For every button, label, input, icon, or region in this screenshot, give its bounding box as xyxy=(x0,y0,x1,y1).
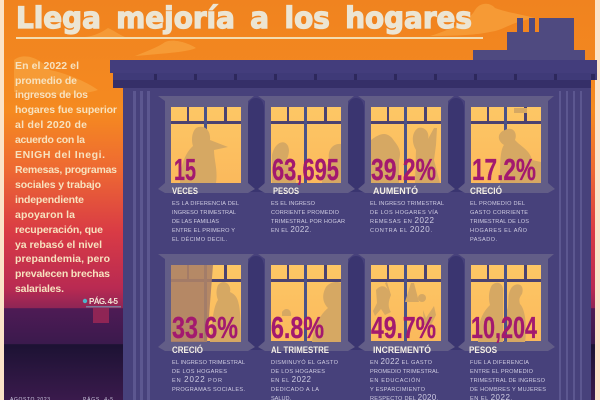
title: Llega mejoría a los hogares xyxy=(16,1,472,35)
number: 39.2% xyxy=(371,152,436,187)
description: GASTO CORRIENTE xyxy=(470,210,528,216)
label: VECES xyxy=(172,186,198,196)
silhouette: mother and child xyxy=(210,282,241,342)
intro text block: al del 2020 de xyxy=(15,119,87,131)
silhouette: people xyxy=(272,142,341,183)
label: CRECIÓ xyxy=(172,344,203,355)
page reference: PÁG. 4-5 xyxy=(89,297,119,306)
intro text block: En el 2022 el xyxy=(15,60,79,72)
description xyxy=(172,201,239,243)
description: DE LOS HOGARES xyxy=(172,369,227,375)
number: 63,695 xyxy=(272,152,339,187)
description xyxy=(271,359,339,400)
page reference xyxy=(83,297,121,323)
description xyxy=(172,360,245,393)
number: 33.6% xyxy=(172,310,238,345)
intro text block: ya rebasó el nivel xyxy=(15,239,102,251)
roof cornice xyxy=(110,60,597,88)
description: ENTRE EL PRIMERO Y xyxy=(172,228,235,234)
description: PROMEDIO TRIMESTRAL xyxy=(370,369,439,375)
description: DE LAS FAMILIAS xyxy=(172,219,219,225)
intro text block: promedio de xyxy=(15,75,77,87)
silhouette: man and woman xyxy=(478,283,526,342)
label: CRECIÓ xyxy=(470,185,502,196)
window: 10,204 pesos xyxy=(458,254,555,400)
description: ES EL INGRESO xyxy=(271,201,316,207)
curtain xyxy=(171,265,213,342)
silhouette: violinist xyxy=(180,127,228,183)
number: 6.8% xyxy=(271,310,324,345)
description: EL PROMEDIO DEL xyxy=(470,201,525,207)
pillars xyxy=(248,98,464,350)
label: AL TRIMESTRE xyxy=(271,345,329,355)
description: DE LOS HOGARES VÍA xyxy=(370,209,438,216)
wall stripes xyxy=(133,91,582,400)
description xyxy=(470,201,529,243)
window: 33.6% crecio xyxy=(158,254,255,393)
description: EN EL 2022. xyxy=(271,225,311,234)
description: CONTRA EL 2020. xyxy=(370,225,432,234)
label: PESOS xyxy=(273,186,299,196)
window: 17.2% crecio xyxy=(458,96,555,243)
title underline xyxy=(16,37,483,39)
window: 63,695 pesos xyxy=(258,96,355,234)
silhouette: child playing, lamp and ball xyxy=(373,282,436,325)
intro text block: sociales y trabajo xyxy=(15,179,101,191)
description: ENTRE EL PROMEDIO xyxy=(470,369,534,375)
description: TRIMESTRAL DE INGRESO xyxy=(470,378,546,384)
description: EN 2022 EL GASTO xyxy=(370,357,433,366)
description: EL INGRESO TRIMESTRAL xyxy=(172,360,245,366)
description: DEDICADO A LA xyxy=(271,387,319,393)
label: INCREMENTÓ xyxy=(373,344,431,355)
description: HOGARES EL AÑO xyxy=(470,227,528,234)
window: 15 veces xyxy=(158,96,255,243)
description xyxy=(271,201,345,234)
description: Y ESPARCIMIENTO xyxy=(370,387,426,393)
description: REMESAS EN 2022 xyxy=(370,216,435,225)
building xyxy=(110,18,597,400)
intro text block: prepandemia, pero xyxy=(15,253,110,265)
chimney xyxy=(473,18,585,60)
description: DE LOS HOGARES xyxy=(271,369,325,375)
description: EL DÉCIMO DECIL. xyxy=(172,236,227,243)
window: 6.8% al trimestre xyxy=(258,254,355,400)
description: INGRESO TRIMESTRAL xyxy=(172,210,236,216)
number: 49.7% xyxy=(371,310,436,345)
description: CORRIENTE PROMEDIO xyxy=(271,210,340,216)
number: 10,204 xyxy=(471,310,538,345)
description: ES LA DIFERENCIA DEL xyxy=(172,201,239,207)
description xyxy=(470,360,546,400)
intro text block: ENIGH del Inegi. xyxy=(15,149,105,161)
intro text block: prevalecen brechas xyxy=(15,268,110,280)
intro text block xyxy=(15,60,117,295)
wall xyxy=(123,85,591,400)
number: 17.2% xyxy=(472,152,536,187)
label: PESOS xyxy=(469,345,497,355)
intro text block: apoyaron la xyxy=(15,209,75,221)
window: 39.2% aumento xyxy=(358,96,455,234)
description xyxy=(370,201,444,234)
description: TRIMESTRAL POR HOGAR xyxy=(271,219,345,225)
lamp xyxy=(514,108,527,113)
footer line xyxy=(10,396,113,400)
intro text block: ingresos de los xyxy=(15,89,88,101)
clouds xyxy=(14,4,535,95)
description: TRIMESTRAL DE LOS xyxy=(470,219,529,225)
description: EN EDUCACIÓN xyxy=(370,377,420,384)
description: EL INGRESO TRIMESTRAL xyxy=(370,201,444,207)
silhouette: patient xyxy=(282,282,341,342)
intro text block: salariales. xyxy=(15,283,64,295)
description: PASADO. xyxy=(470,237,497,243)
description: PROGRAMAS SOCIALES. xyxy=(172,387,245,393)
description: EN EL 2022 xyxy=(271,375,312,384)
intro text block: acuerdo con la xyxy=(15,134,85,146)
description: DISMINUYÓ EL GASTO xyxy=(271,359,339,366)
intro text block: recuperación, que xyxy=(15,224,103,236)
silhouette: person at table xyxy=(499,129,541,183)
intro text block: independiente xyxy=(15,194,84,206)
label: AUMENTÓ xyxy=(373,185,418,196)
number: 15 xyxy=(174,152,196,187)
silhouette: family xyxy=(371,128,440,183)
description: FUE LA DIFERENCIA xyxy=(470,360,529,366)
description: DE HOMBRES Y MUJERES xyxy=(470,387,546,393)
intro text block: hogares fue superior xyxy=(15,104,117,116)
description xyxy=(370,357,439,400)
window: 49.7% incremento xyxy=(358,254,455,400)
description: EN 2022 POR xyxy=(172,375,222,384)
intro text block: Remesas, programas xyxy=(15,164,117,176)
